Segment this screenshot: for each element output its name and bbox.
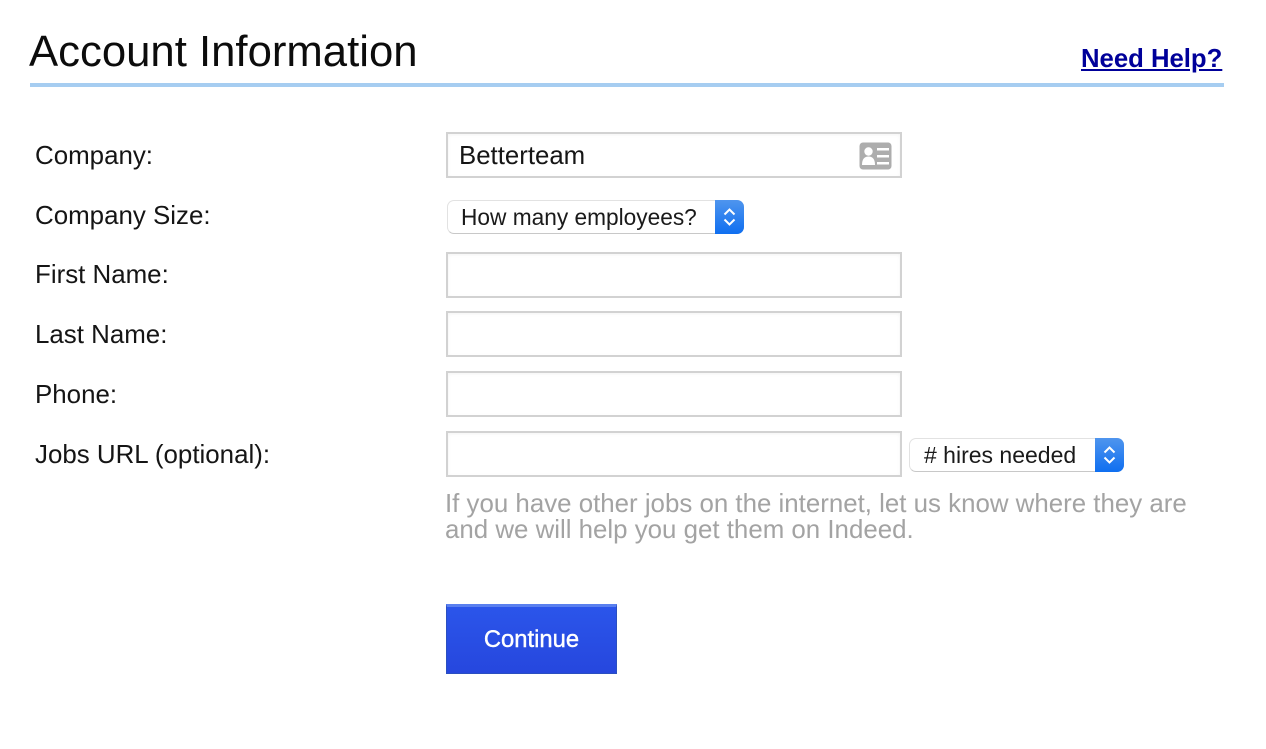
label: phone: Phone: — [35, 381, 117, 409]
select: company size — [447, 200, 744, 234]
label: jobs url: Jobs URL (optional): — [35, 441, 270, 469]
select stepper — [715, 200, 744, 234]
input: phone — [446, 371, 902, 417]
help text — [445, 490, 1187, 544]
title: Account Information — [29, 27, 418, 76]
input: jobs url — [446, 431, 902, 477]
help link: Need Help? — [1081, 45, 1222, 73]
select: hires needed: # hires needed — [924, 442, 1076, 468]
label: company size: Company Size: — [35, 202, 211, 230]
select: company size: How many employees? — [461, 204, 697, 230]
help text: If you have other jobs on the internet, let us know where they are — [445, 490, 1187, 518]
input value: Betterteam — [459, 142, 585, 170]
header divider — [30, 83, 1224, 87]
continue button: Continue — [484, 626, 579, 653]
input: last name — [446, 311, 902, 357]
label: first name: First Name: — [35, 261, 169, 289]
select: hires needed — [909, 438, 1124, 472]
label: company: Company: — [35, 142, 153, 170]
continue button — [446, 604, 617, 674]
select stepper — [1095, 438, 1124, 472]
input: company — [446, 132, 902, 178]
icon: contact card — [860, 142, 892, 170]
input: first name — [446, 252, 902, 298]
help text: and we will help you get them on Indeed. — [445, 516, 914, 544]
label: last name: Last Name: — [35, 321, 167, 349]
